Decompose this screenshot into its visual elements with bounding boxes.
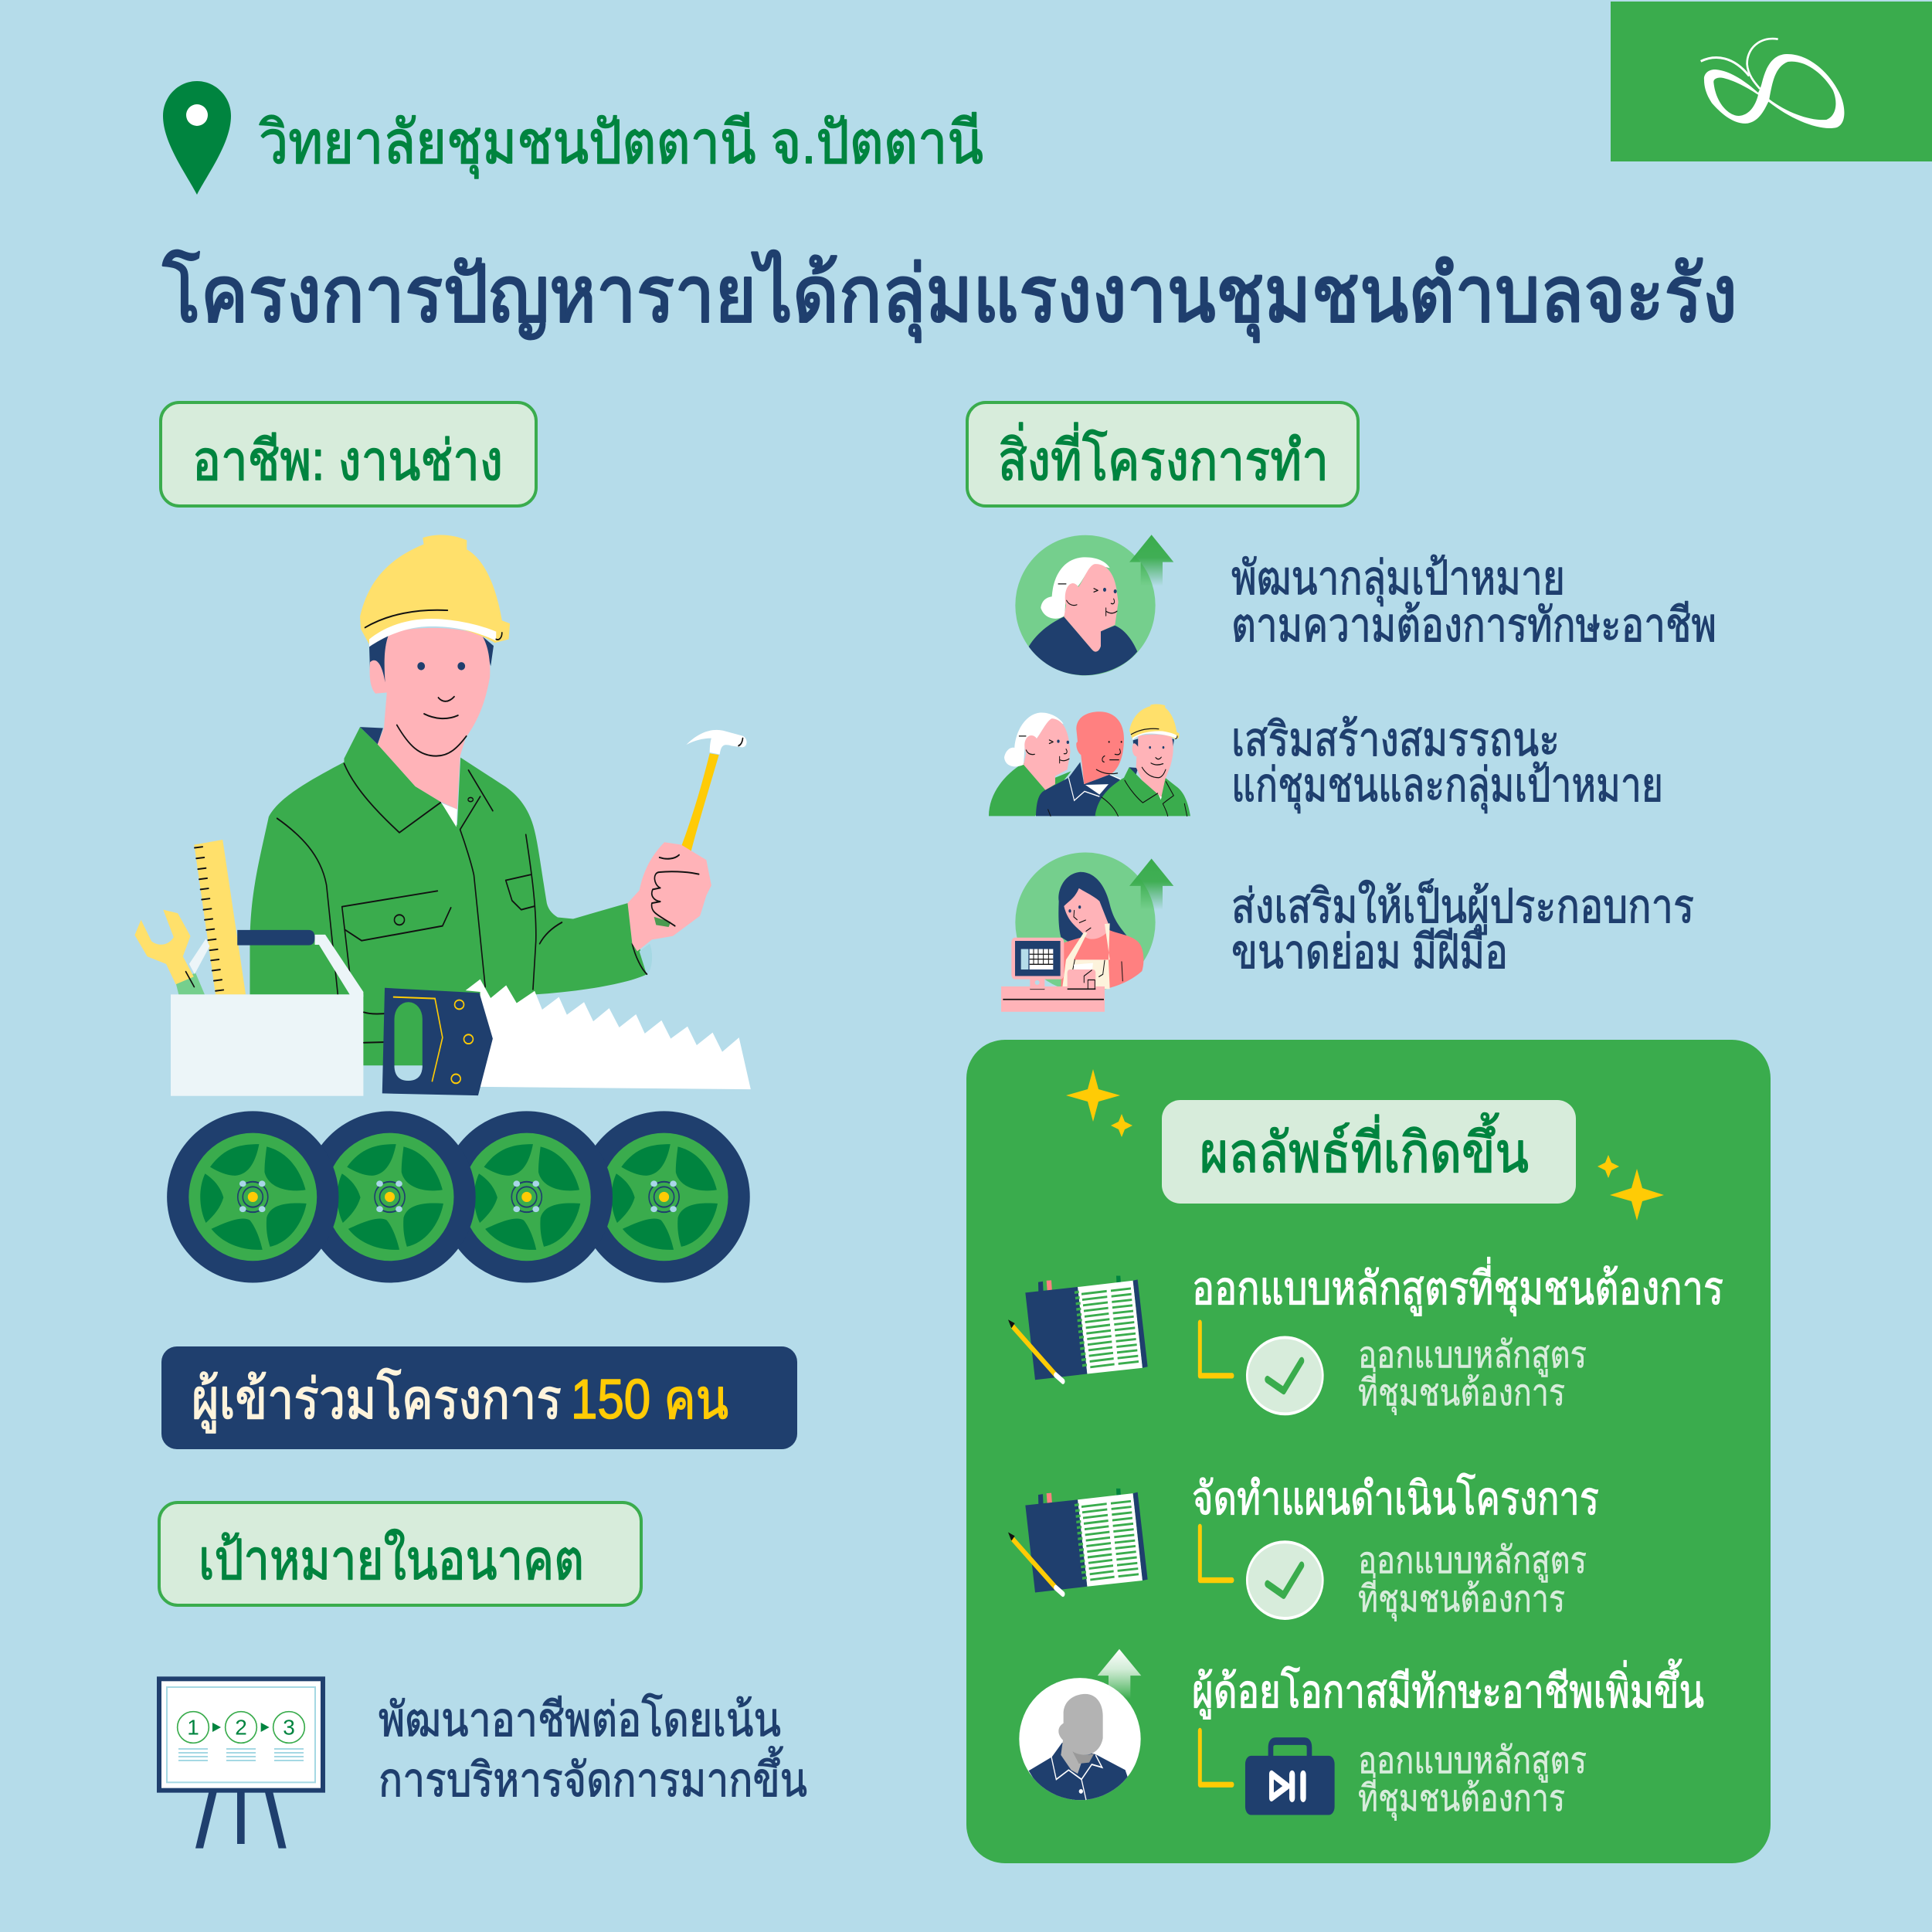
- result 1 text: ที่ชุมชนต้องการ: [1358, 1367, 1565, 1415]
- icon: notebook 2: [1008, 1489, 1148, 1594]
- chip: what the project does: สิ่งที่โครงการทำ: [998, 423, 1329, 492]
- result 2 text: จัดทำแผนดำเนินโครงการ: [1192, 1472, 1599, 1524]
- result 3 text: ออกแบบหลักสูตร: [1358, 1740, 1587, 1783]
- illustration: woman at cash register: [1001, 853, 1173, 1012]
- result 3 text: ที่ชุมชนต้องการ: [1358, 1772, 1565, 1821]
- hand: [627, 842, 711, 952]
- title: โครงการปัญหารายได้กลุ่มแรงงานชุมชนตำบลจะรัง: [162, 250, 1737, 342]
- text: future goal description: พัฒนาอาชีพต่อโดยเน้น: [379, 1693, 781, 1746]
- illustration: woman with up arrow: [1015, 535, 1173, 676]
- face: [370, 628, 490, 810]
- icon: check 2: [1247, 1542, 1323, 1618]
- icon: presentation board: 3: [283, 1715, 295, 1739]
- text: step 1: [1231, 552, 1716, 651]
- ruler: [194, 840, 246, 994]
- result 1 text: [1192, 1257, 1723, 1415]
- result 2 text: [1192, 1472, 1599, 1621]
- chip: future goal: [159, 1502, 641, 1605]
- icon: sparkles right: [1598, 1155, 1664, 1221]
- text: step 2: แก่ชุมชนและกลุ่มเป้าหมาย: [1231, 759, 1663, 813]
- chip: what the project does: [967, 402, 1358, 506]
- text: step 1: พัฒนากลุ่มเป้าหมาย: [1231, 552, 1565, 606]
- jacket: [250, 727, 647, 1065]
- toolbox: [171, 994, 363, 1096]
- chip: results: [1162, 1100, 1576, 1204]
- result rows art: [1008, 1276, 1335, 1815]
- text: step 3: ส่งเสริมให้เป็นผู้ประกอบการ: [1231, 879, 1694, 935]
- result 2 text: ที่ชุมชนต้องการ: [1358, 1573, 1565, 1621]
- icon: presentation board: [159, 1679, 323, 1849]
- text: step 2: [1231, 713, 1663, 813]
- icon: location pin: [163, 81, 231, 195]
- icon: sparkles left: [1066, 1069, 1132, 1137]
- result 3 text: ผู้ด้อยโอกาสมีทักษะอาชีพเพิ่มขึ้น: [1192, 1659, 1704, 1719]
- illustration: worker with tools: [134, 535, 751, 1282]
- text: future goal description: [379, 1693, 807, 1806]
- hair: [369, 634, 494, 682]
- college name: วิทยาลัยชุมชนปัตตานี จ.ปัตตานี: [259, 110, 983, 178]
- icon: notebook 1: [1008, 1276, 1148, 1381]
- result 1 text: ออกแบบหลักสูตร: [1358, 1335, 1587, 1377]
- text: step 2: เสริมสร้างสมรรถนะ: [1231, 713, 1560, 766]
- panel: results: [966, 1040, 1771, 1863]
- icon: person with arrow: [1019, 1649, 1141, 1802]
- text: future goal description: การบริหารจัดการมากขึ้น: [379, 1746, 807, 1806]
- bar: participants: 150 คน: [571, 1369, 728, 1431]
- result 2 text: ออกแบบหลักสูตร: [1358, 1540, 1587, 1583]
- bar: participants: [161, 1346, 797, 1449]
- icon: check 1: [1247, 1337, 1323, 1414]
- text: step 3: [1231, 879, 1694, 978]
- wrench: [176, 973, 205, 994]
- chip: future goal: เป้าหมายในอนาคต: [199, 1529, 584, 1591]
- chip: occupation: อาชีพ: งานช่าง: [192, 430, 503, 492]
- bar: participants: ผู้เข้าร่วมโครงการ: [192, 1367, 562, 1433]
- wheels: [167, 1111, 750, 1282]
- result 3 text: [1192, 1659, 1704, 1821]
- chip: occupation: [161, 402, 536, 506]
- text: step 3: ขนาดย่อม มีฝีมือ: [1231, 925, 1508, 978]
- icon: presentation board: 2: [235, 1715, 247, 1739]
- icon: briefcase with play-pause: [1245, 1741, 1335, 1815]
- helmet: [360, 535, 510, 644]
- icon: presentation board: 1: [187, 1715, 199, 1739]
- saw: [466, 980, 751, 1089]
- result 1 text: ออกแบบหลักสูตรที่ชุมชนต้องการ: [1192, 1257, 1723, 1316]
- toolbox handle: [189, 935, 363, 997]
- text: step 1: ตามความต้องการทักษะอาชีพ: [1231, 599, 1716, 651]
- jacket lines: [277, 763, 647, 994]
- hammer: [680, 753, 719, 854]
- brackets: [1200, 1323, 1232, 1784]
- illustration: three people group: [989, 705, 1190, 816]
- chip: results: ผลลัพธ์ที่เกิดขึ้น: [1200, 1112, 1529, 1184]
- logo block: [1611, 2, 1932, 161]
